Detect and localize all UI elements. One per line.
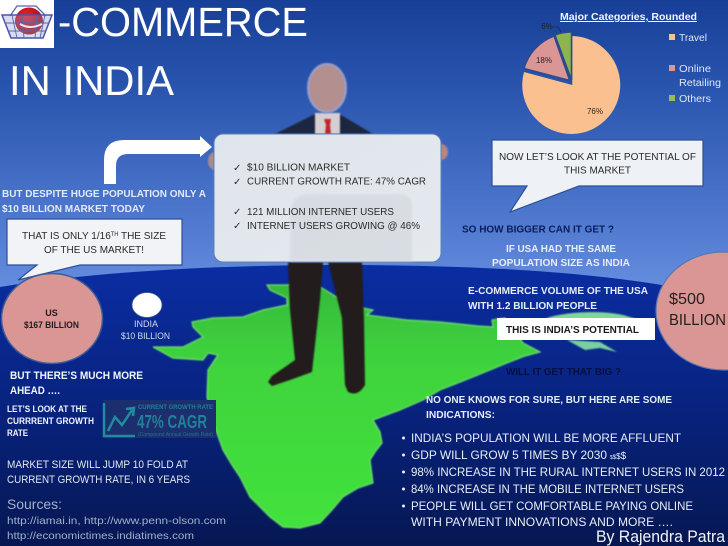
indications list [402, 431, 725, 529]
indications list: WITH PAYMENT INNOVATIONS AND MORE …. [411, 515, 673, 529]
chart legend: Travel [679, 33, 707, 44]
growth rate badge [103, 400, 216, 438]
text: market size jump: CURRENT GROWTH RATE, IN 6 YEARS [7, 474, 190, 486]
title [9, 0, 308, 104]
board text: ✓ [233, 177, 241, 188]
icon: shopping basket logo [0, 0, 54, 48]
text: market size jump [7, 459, 190, 486]
chart legend [669, 33, 721, 105]
left hand [208, 152, 222, 170]
indications list: $$$$ [610, 451, 627, 462]
callout: 1/16th of US market [7, 219, 182, 280]
board text: ✓ [233, 207, 241, 218]
growth rate badge: CURRENT GROWTH RATE [138, 404, 214, 411]
text: no one knows [426, 394, 672, 421]
text: no one knows: INDICATIONS: [426, 409, 495, 421]
chart title: Major Categories, Rounded [560, 12, 697, 23]
trouser legs [268, 262, 365, 393]
man holding the board [208, 64, 448, 393]
pie labels: 18% [536, 56, 552, 65]
pie chart: major categories [522, 22, 620, 134]
text: if USA had same population [492, 243, 630, 269]
India market circle [121, 292, 170, 341]
pie labels [536, 22, 603, 116]
author credit: By Rajendra Patra [596, 528, 726, 546]
title: IN INDIA [9, 57, 174, 104]
US market circle: US [45, 308, 58, 318]
text: much more ahead: AHEAD …. [10, 385, 60, 397]
title: -COMMERCE [58, 0, 308, 45]
text: despite population: $10 BILLION MARKET TODAY [2, 203, 145, 215]
text: e-commerce volume [468, 285, 648, 312]
India market circle: INDIA [134, 319, 158, 329]
pie labels: 76% [587, 107, 603, 116]
US market circle [2, 274, 102, 364]
text: current growth rate: RATE [7, 428, 28, 438]
callout: 1/16th of US market: THAT IS ONLY 1/16 [22, 230, 115, 242]
arrow to board [104, 136, 212, 184]
sources [7, 496, 226, 542]
chart legend: Online [679, 64, 711, 75]
callout: India's potential [497, 318, 655, 340]
head [308, 64, 346, 112]
callout: look at potential: NOW LET’S LOOK AT THE POTENTIAL OF [499, 151, 696, 163]
text: if USA had same population: IF USA HAD THE SAME [506, 243, 616, 255]
background sky [0, 0, 728, 300]
chart legend: Retailing [679, 78, 721, 89]
callout: look at potential: THIS MARKET [564, 164, 632, 176]
board text: INTERNET USERS GROWING @ 46% [247, 220, 420, 232]
callout: look at potential [492, 140, 703, 212]
text: much more ahead: BUT THERE’S MUCH MORE [10, 370, 143, 382]
text: current growth rate [7, 404, 94, 438]
growth rate badge: 47% CAGR [137, 412, 207, 432]
chart legend: Others [679, 94, 711, 105]
white board [214, 134, 441, 262]
sources: http://iamai.in, http://www.penn-olson.com [7, 515, 226, 527]
indications list: PEOPLE WILL GET COMFORTABLE PAYING ONLINE [411, 499, 693, 513]
watermark silhouette on board [290, 194, 412, 262]
right hand [434, 144, 448, 160]
US market circle: $167 BILLION [24, 320, 79, 330]
sources: http://economictimes.indiatimes.com [7, 530, 194, 542]
text: despite population [2, 188, 206, 215]
globe horizon [0, 265, 728, 546]
tie [324, 119, 331, 134]
pie slice: travel 76% [522, 36, 620, 134]
callout: 1/16th of US market: OF THE US MARKET! [44, 244, 144, 256]
growth rate badge: (Compound Annual Growth Rate) [138, 432, 213, 438]
text: e-commerce volume: E-COMMERCE VOLUME OF THE USA [468, 285, 648, 297]
board text: CURRENT GROWTH RATE: 47% CAGR [247, 176, 426, 188]
text: how bigger: SO HOW BIGGER CAN IT GET ? [462, 224, 614, 236]
callout: 1/16th of US market: THE SIZE [118, 230, 166, 242]
pie labels: 6% [541, 22, 553, 31]
shirt [315, 113, 340, 134]
text: despite population: BUT DESPITE HUGE POPULATION ONLY A [2, 188, 206, 200]
board text: $10 BILLION MARKET [247, 162, 351, 174]
text: current growth rate: LET’S LOOK AT THE [7, 404, 87, 414]
pie slice: others 6% [555, 32, 572, 80]
callout: 1/16th of US market: TH [111, 232, 118, 238]
sources: Sources: [7, 496, 62, 512]
callout: India's potential: THIS IS INDIA’S POTENTIAL [506, 324, 640, 336]
$500 billion circle [656, 252, 728, 370]
board text: ✓ [233, 221, 241, 232]
indications list: GDP WILL GROW 5 TIMES BY 2030 [411, 448, 607, 462]
board text: ✓ [233, 163, 241, 174]
jacket [275, 115, 373, 134]
text: if USA had same population: POPULATION SIZE AS INDIA [492, 257, 630, 269]
text: market size jump: MARKET SIZE WILL JUMP 10 FOLD AT [7, 459, 188, 471]
board text: 121 MILLION INTERNET USERS [247, 206, 394, 218]
text: much more ahead [10, 370, 143, 397]
$500 billion circle: $500 [669, 291, 705, 308]
icon: growth chart [104, 403, 135, 436]
board text [233, 162, 426, 232]
text: will it get that big: WILL IT GET THAT BIG ? [506, 366, 621, 378]
indications list: 84% INCREASE IN THE MOBILE INTERNET USERS [411, 482, 684, 496]
indications list: INDIA’S POPULATION WILL BE MORE AFFLUENT [411, 431, 682, 445]
pie slice: online retailing 18% [524, 36, 570, 80]
India market circle: $10 BILLION [121, 331, 170, 341]
text: e-commerce volume: WITH 1.2 BILLION PEOPLE [468, 300, 597, 312]
text: current growth rate: CURRRENT GROWTH [7, 416, 94, 426]
text: no one knows: NO ONE KNOWS FOR SURE, BUT HERE ARE SOME [426, 394, 672, 406]
map of India [153, 282, 640, 528]
